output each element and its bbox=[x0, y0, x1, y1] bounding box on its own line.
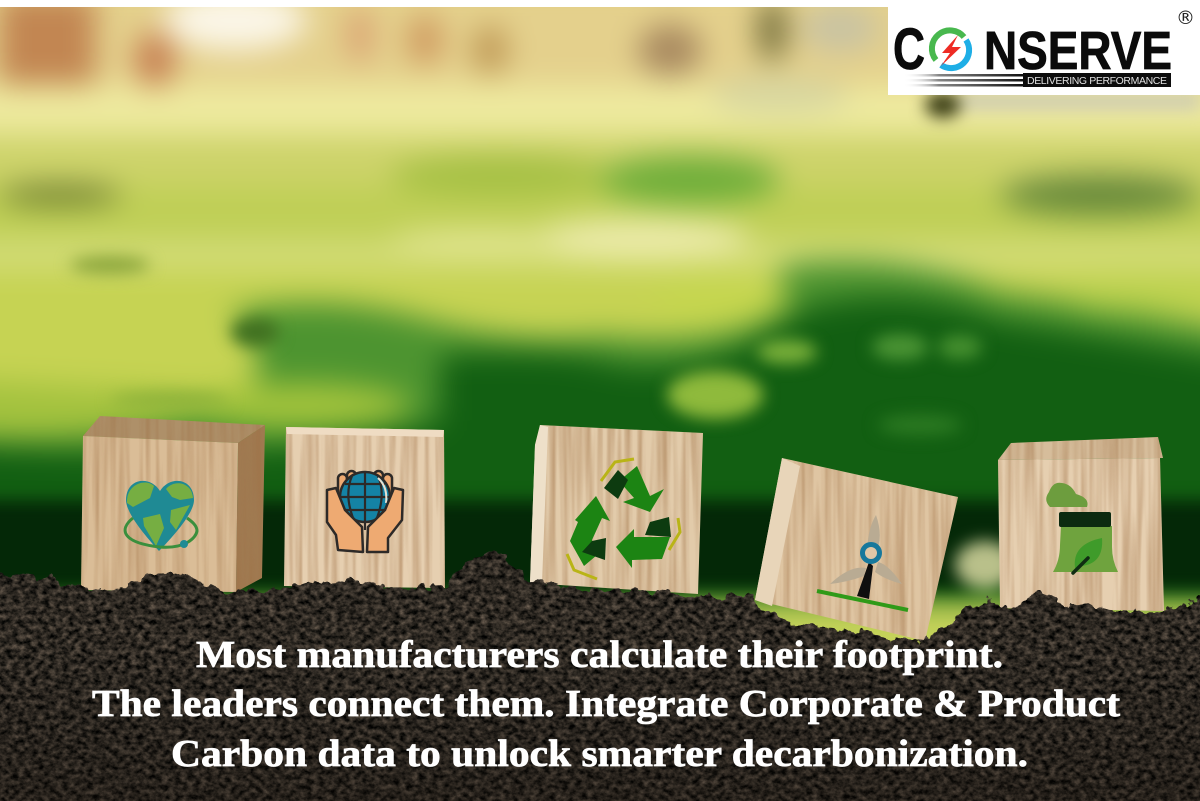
icon: cooling tower with leaf bbox=[1053, 512, 1118, 573]
logo tagline bar bbox=[903, 73, 1171, 87]
soil foreground bbox=[0, 548, 1200, 801]
icon: heart earth with orbit bbox=[125, 481, 197, 551]
logo wordmark: C bbox=[893, 17, 925, 82]
headline text: Carbon data to unlock smarter decarbonization. bbox=[171, 733, 1028, 775]
wooden block 1: heart earth bbox=[81, 416, 265, 592]
wooden block 4: wind turbine bbox=[755, 458, 958, 641]
wooden block 5: green power plant bbox=[998, 437, 1164, 611]
headline text: The leaders connect them. Integrate Corporate & Product bbox=[92, 683, 1120, 725]
icon: recycle symbol bbox=[567, 459, 680, 579]
logo wordmark: NSERVE bbox=[984, 21, 1172, 81]
icon: hands and globe bbox=[327, 471, 403, 552]
registered mark: ® bbox=[1176, 7, 1195, 29]
icon: cloud bbox=[1046, 483, 1088, 507]
logo icon: energy cycle with bolt bbox=[932, 30, 969, 68]
logo wordmark bbox=[893, 17, 1172, 82]
top white strip bbox=[0, 0, 1200, 7]
logo panel bbox=[888, 7, 1200, 95]
icon: wind turbine bbox=[817, 515, 908, 610]
wooden block 3: recycling arrows bbox=[530, 425, 703, 594]
headline text bbox=[92, 634, 1120, 775]
wooden block 2: hands holding globe bbox=[284, 427, 445, 588]
logo tagline bar: DELIVERING PERFORMANCE bbox=[1027, 75, 1167, 87]
headline text: Most manufacturers calculate their footprint. bbox=[196, 634, 1003, 676]
